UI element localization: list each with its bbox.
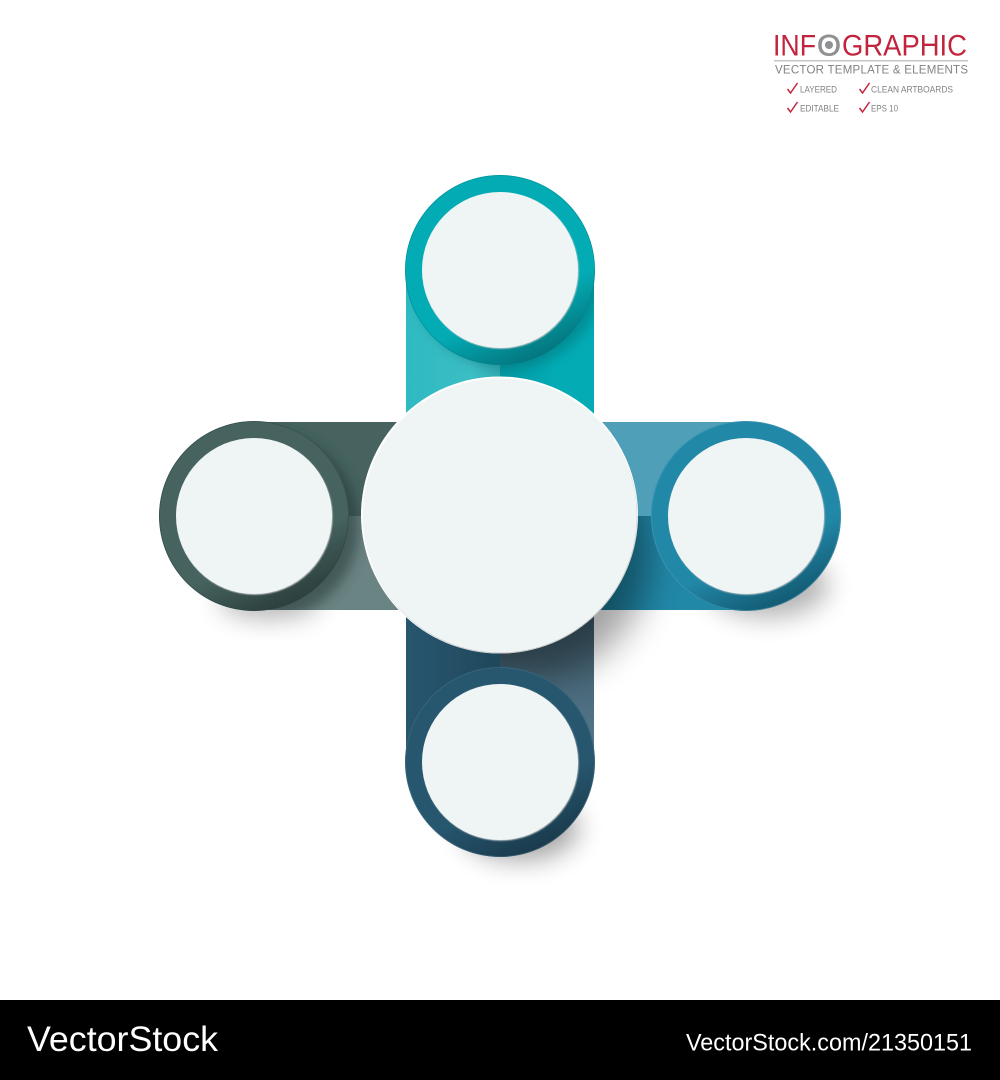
ground shadow: left node [220,582,320,618]
right ring [651,421,841,611]
center circle cast shadow [500,516,667,689]
node: left [159,421,349,611]
logo title: INFOGRAPHIC: INF [773,30,816,62]
left inner disc [176,438,332,594]
footer brand: VectorStock [27,1020,219,1059]
bottom arm [406,610,594,762]
footer bar [0,1000,1000,1080]
center disc [361,376,638,654]
node: bottom [405,667,595,857]
logo title: INFOGRAPHIC: O [817,30,841,62]
feature: layered [788,83,837,94]
left ring [159,421,349,611]
top arm [406,284,594,414]
bottom inner disc [422,684,578,840]
feature: editable: EDITABLE [800,104,839,114]
logo subtitle: VECTOR TEMPLATE & ELEMENTS [775,64,968,76]
left arm [268,422,399,610]
feature: eps 10 [860,102,898,114]
footer image id: VectorStock.com/21350151 [686,1030,972,1056]
feature: layered: LAYERED [800,84,837,94]
bottom ring [405,667,595,857]
feature: editable [788,102,839,114]
logo block [773,30,968,114]
logo title: INFOGRAPHIC [773,30,967,62]
ground shadow: right node [708,553,828,617]
feature: eps 10: EPS 10 [871,104,898,114]
right arm [590,422,746,610]
node: top [405,175,595,365]
node: right [651,421,841,611]
right inner disc [668,438,824,594]
logo title: INFOGRAPHIC: GRAPHIC [842,30,967,62]
top ring [405,175,595,365]
feature: clean artboards: CLEAN ARTBOARDS [871,84,953,94]
ground shadow: bottom node [462,796,578,860]
top inner disc [422,192,578,348]
